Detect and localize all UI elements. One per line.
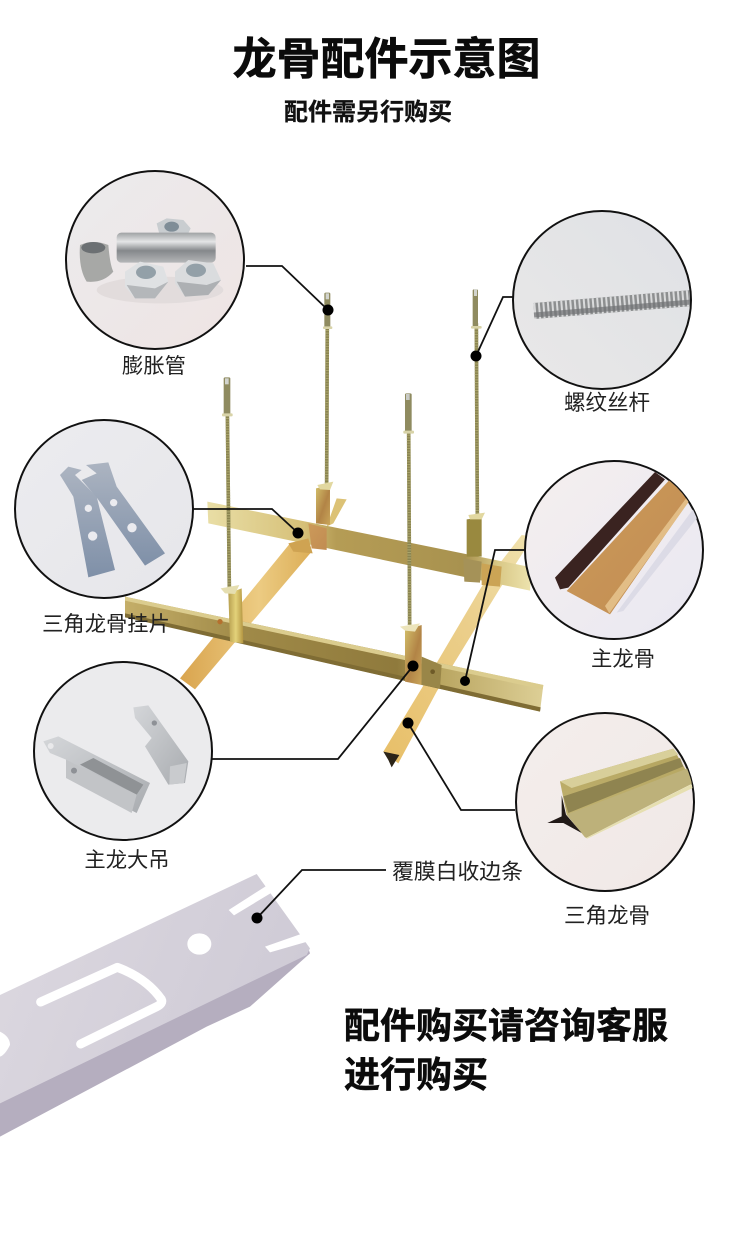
keel frame assembly bbox=[125, 289, 543, 767]
purchase note: 进行购买 bbox=[344, 1054, 488, 1095]
photo disc bbox=[66, 171, 244, 349]
white edge trim strip bbox=[0, 874, 310, 1137]
purchase note: 配件购买请咨询客服 bbox=[344, 1005, 668, 1046]
label: 主龙骨 bbox=[591, 647, 655, 671]
hanger plates bbox=[60, 462, 165, 577]
cross bars bbox=[180, 498, 533, 767]
photo disc bbox=[516, 713, 694, 891]
callout: triangular keel hanger bbox=[15, 420, 193, 636]
callout: triangular keel bbox=[516, 713, 694, 928]
photo disc bbox=[34, 662, 212, 840]
U-shaped slot bbox=[41, 967, 162, 1044]
subtitle: 配件需另行购买 bbox=[284, 99, 452, 126]
callout: expansion tube bbox=[66, 171, 244, 378]
trim top face bbox=[0, 874, 310, 1103]
label: white edge trim: 覆膜白收边条 bbox=[392, 859, 523, 884]
photo disc bbox=[525, 461, 703, 639]
trim slots and holes bbox=[0, 884, 307, 1057]
photo disc bbox=[15, 420, 193, 598]
title: 龙骨配件示意图 bbox=[232, 35, 540, 84]
label: 三角龙骨 bbox=[564, 904, 650, 928]
trim side face bbox=[0, 948, 310, 1137]
clips bbox=[43, 705, 188, 813]
triangular keel profile bbox=[547, 749, 693, 839]
leader dots bbox=[252, 304, 482, 924]
purchase note bbox=[344, 1005, 668, 1095]
photo disc bbox=[513, 211, 691, 389]
back main rail bbox=[207, 502, 532, 591]
leader lines bbox=[192, 266, 524, 918]
front main rail bbox=[125, 597, 543, 712]
threaded rod bbox=[534, 298, 692, 315]
hanger clips bbox=[217, 482, 502, 688]
callout: main keel clip bbox=[34, 662, 212, 872]
callout: threaded rod bbox=[513, 211, 692, 415]
nuts and tube bbox=[80, 218, 223, 303]
label: 主龙大吊 bbox=[84, 848, 170, 872]
label: 三角龙骨挂片 bbox=[42, 612, 170, 636]
label: 螺纹丝杆 bbox=[564, 391, 650, 415]
label: 膨胀管 bbox=[122, 354, 186, 378]
callout: main keel bbox=[525, 461, 703, 671]
threaded rods bbox=[222, 289, 482, 625]
keel profile bbox=[555, 472, 700, 614]
